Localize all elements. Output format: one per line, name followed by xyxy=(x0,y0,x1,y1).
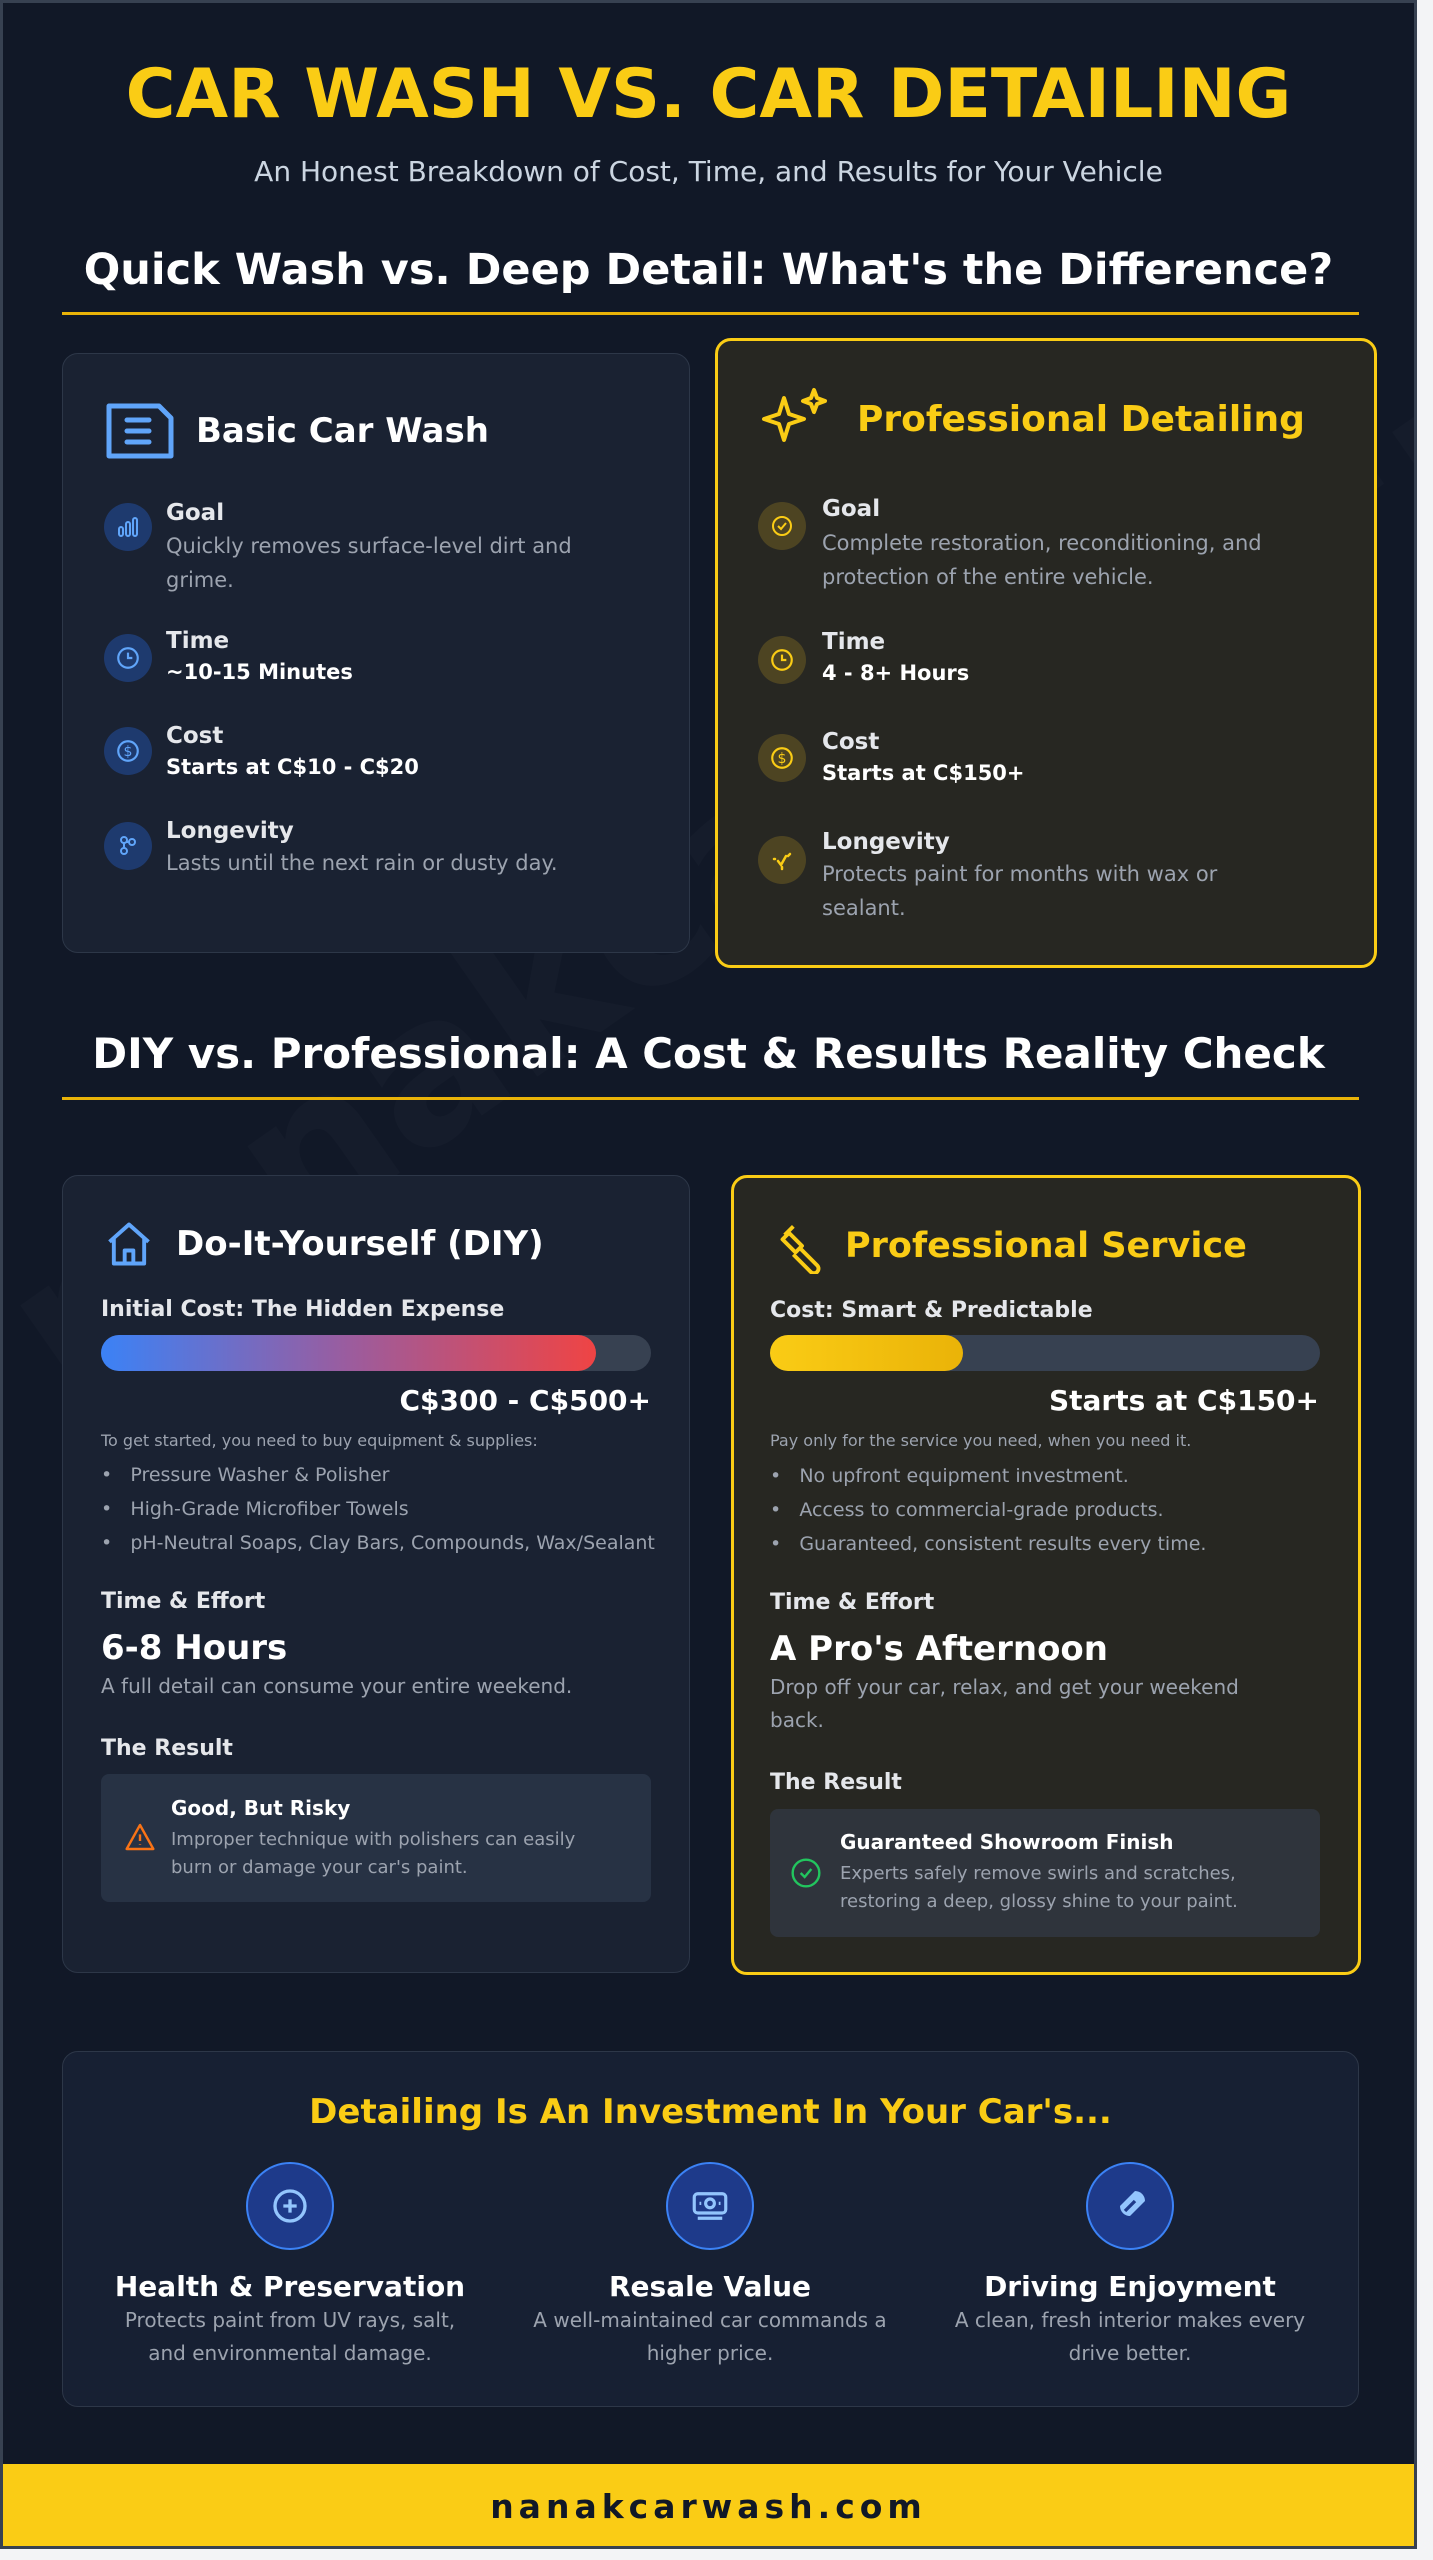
time desc: Drop off your car, relax, and get your weekend xyxy=(770,1675,1239,1699)
item: goal: Quickly removes surface-level dirt and xyxy=(166,534,572,558)
result label: The Result xyxy=(101,1736,233,1761)
item: cost: $ xyxy=(124,744,132,760)
column: enjoyment xyxy=(955,2162,1305,2365)
column: enjoyment: A clean, fresh interior makes every xyxy=(955,2308,1305,2332)
result label: The Result xyxy=(770,1770,902,1795)
result box xyxy=(770,1809,1320,1937)
item: cost: Starts at C$10 - C$20 xyxy=(166,755,419,779)
heading: quick wash vs deep detail: Quick Wash vs. Deep Detail: What's the Difference? xyxy=(84,245,1333,295)
result box: burn or damage your car's paint. xyxy=(171,1857,468,1878)
item: time xyxy=(758,629,969,685)
icon: warning xyxy=(125,1824,154,1850)
list: • High-Grade Microfiber Towels xyxy=(101,1498,409,1520)
note: To get started, you need to buy equipment & supplies: xyxy=(101,1431,538,1450)
column: enjoyment: Driving Enjoyment xyxy=(984,2270,1276,2303)
item: cost: $ xyxy=(778,751,786,767)
icon: sparkles xyxy=(762,388,828,442)
footer xyxy=(3,2464,1414,2549)
subtitle: An Honest Breakdown of Cost, Time, and Results for Your Vehicle xyxy=(254,155,1163,188)
item: goal: protection of the entire vehicle. xyxy=(822,565,1154,589)
heading: Detailing Is An Investment In Your Car's... xyxy=(309,2092,1112,2132)
note: Pay only for the service you need, when you need it. xyxy=(770,1431,1191,1450)
item: goal: Goal xyxy=(822,496,880,522)
item: time: ~10-15 Minutes xyxy=(166,660,353,684)
time desc: back. xyxy=(770,1708,824,1732)
card title: Basic Car Wash xyxy=(196,411,489,451)
list: • Access to commercial-grade products. xyxy=(770,1499,1164,1521)
card title: Do-It-Yourself (DIY) xyxy=(176,1224,544,1264)
list: • pH-Neutral Soaps, Clay Bars, Compounds, Wax/Sealant xyxy=(101,1532,655,1554)
icon: house xyxy=(108,1222,150,1266)
cost label: Cost: Smart & Predictable xyxy=(770,1298,1093,1323)
bar: diy cost xyxy=(101,1335,651,1371)
column: resale: higher price. xyxy=(647,2341,773,2365)
time value: 6-8 Hours xyxy=(101,1628,287,1668)
card title: Professional Service xyxy=(845,1226,1247,1266)
item: goal: grime. xyxy=(166,568,234,592)
column: enjoyment: drive better. xyxy=(1069,2341,1191,2365)
column: health: Protects paint from UV rays, salt, xyxy=(125,2308,455,2332)
column: resale xyxy=(533,2162,887,2365)
item: longevity: sealant. xyxy=(822,896,906,920)
result box: Good, But Risky xyxy=(171,1796,350,1820)
time desc xyxy=(770,1675,1239,1732)
time value: A Pro's Afternoon xyxy=(770,1629,1108,1669)
footer: nanakcarwash.com xyxy=(490,2487,927,2526)
list: • Pressure Washer & Polisher xyxy=(101,1464,389,1486)
panel: basic car wash xyxy=(62,353,690,953)
item: goal: Complete restoration, reconditioning, and xyxy=(822,531,1262,555)
item: longevity: Longevity xyxy=(166,818,294,844)
result box: Improper technique with polishers can easily xyxy=(171,1829,575,1850)
cost label: Initial Cost: The Hidden Expense xyxy=(101,1297,504,1322)
item: time: 4 - 8+ Hours xyxy=(822,661,969,685)
item: time: Time xyxy=(166,628,229,654)
time label: Time & Effort xyxy=(101,1589,265,1614)
icon: brush xyxy=(780,1225,820,1274)
result box: Experts safely remove swirls and scratches, xyxy=(840,1863,1236,1884)
bar: pro cost xyxy=(770,1335,1320,1371)
item: longevity: Longevity xyxy=(822,829,950,855)
column: health: and environmental damage. xyxy=(148,2341,432,2365)
list: • No upfront equipment investment. xyxy=(770,1465,1129,1487)
panel: investment xyxy=(62,2051,1359,2407)
result box xyxy=(101,1774,651,1902)
column: health xyxy=(115,2162,465,2365)
column: resale: A well-maintained car commands a xyxy=(533,2308,887,2332)
item: time: Time xyxy=(822,629,885,655)
panel: professional service xyxy=(731,1175,1361,1975)
panel: professional detailing xyxy=(715,338,1377,968)
list: • Guaranteed, consistent results every time. xyxy=(770,1533,1206,1555)
item: cost xyxy=(104,723,419,779)
icon: document xyxy=(106,404,174,458)
icon: check circle xyxy=(792,1858,820,1888)
item: goal xyxy=(758,496,1262,589)
item: time xyxy=(104,628,353,684)
item: longevity xyxy=(758,829,1218,920)
column: resale: Resale Value xyxy=(609,2270,811,2303)
item: cost xyxy=(758,729,1025,785)
item: goal xyxy=(104,500,572,592)
heading: diy vs professional: DIY vs. Professional: A Cost & Results Reality Check xyxy=(92,1029,1325,1078)
item: longevity: Lasts until the next rain or dusty day. xyxy=(166,851,558,875)
card title: Professional Detailing xyxy=(857,399,1305,440)
result box: Guaranteed Showroom Finish xyxy=(840,1830,1173,1854)
result box: restoring a deep, glossy shine to your paint. xyxy=(840,1891,1238,1912)
list xyxy=(770,1465,1206,1555)
item: cost: Cost xyxy=(166,723,223,749)
item: cost: Starts at C$150+ xyxy=(822,761,1025,785)
time label: Time & Effort xyxy=(770,1590,934,1615)
item: goal: Goal xyxy=(166,500,224,526)
item: longevity: Protects paint for months with wax or xyxy=(822,862,1217,886)
title: CAR WASH VS. CAR DETAILING xyxy=(126,55,1291,134)
item: longevity xyxy=(104,818,558,875)
cost value: Starts at C$150+ xyxy=(1049,1384,1319,1417)
item: cost: Cost xyxy=(822,729,879,755)
panel: DIY xyxy=(62,1175,690,1973)
cost value: C$300 - C$500+ xyxy=(399,1384,651,1417)
column: health: Health & Preservation xyxy=(115,2270,465,2303)
list xyxy=(101,1464,655,1554)
time desc: A full detail can consume your entire weekend. xyxy=(101,1674,572,1698)
